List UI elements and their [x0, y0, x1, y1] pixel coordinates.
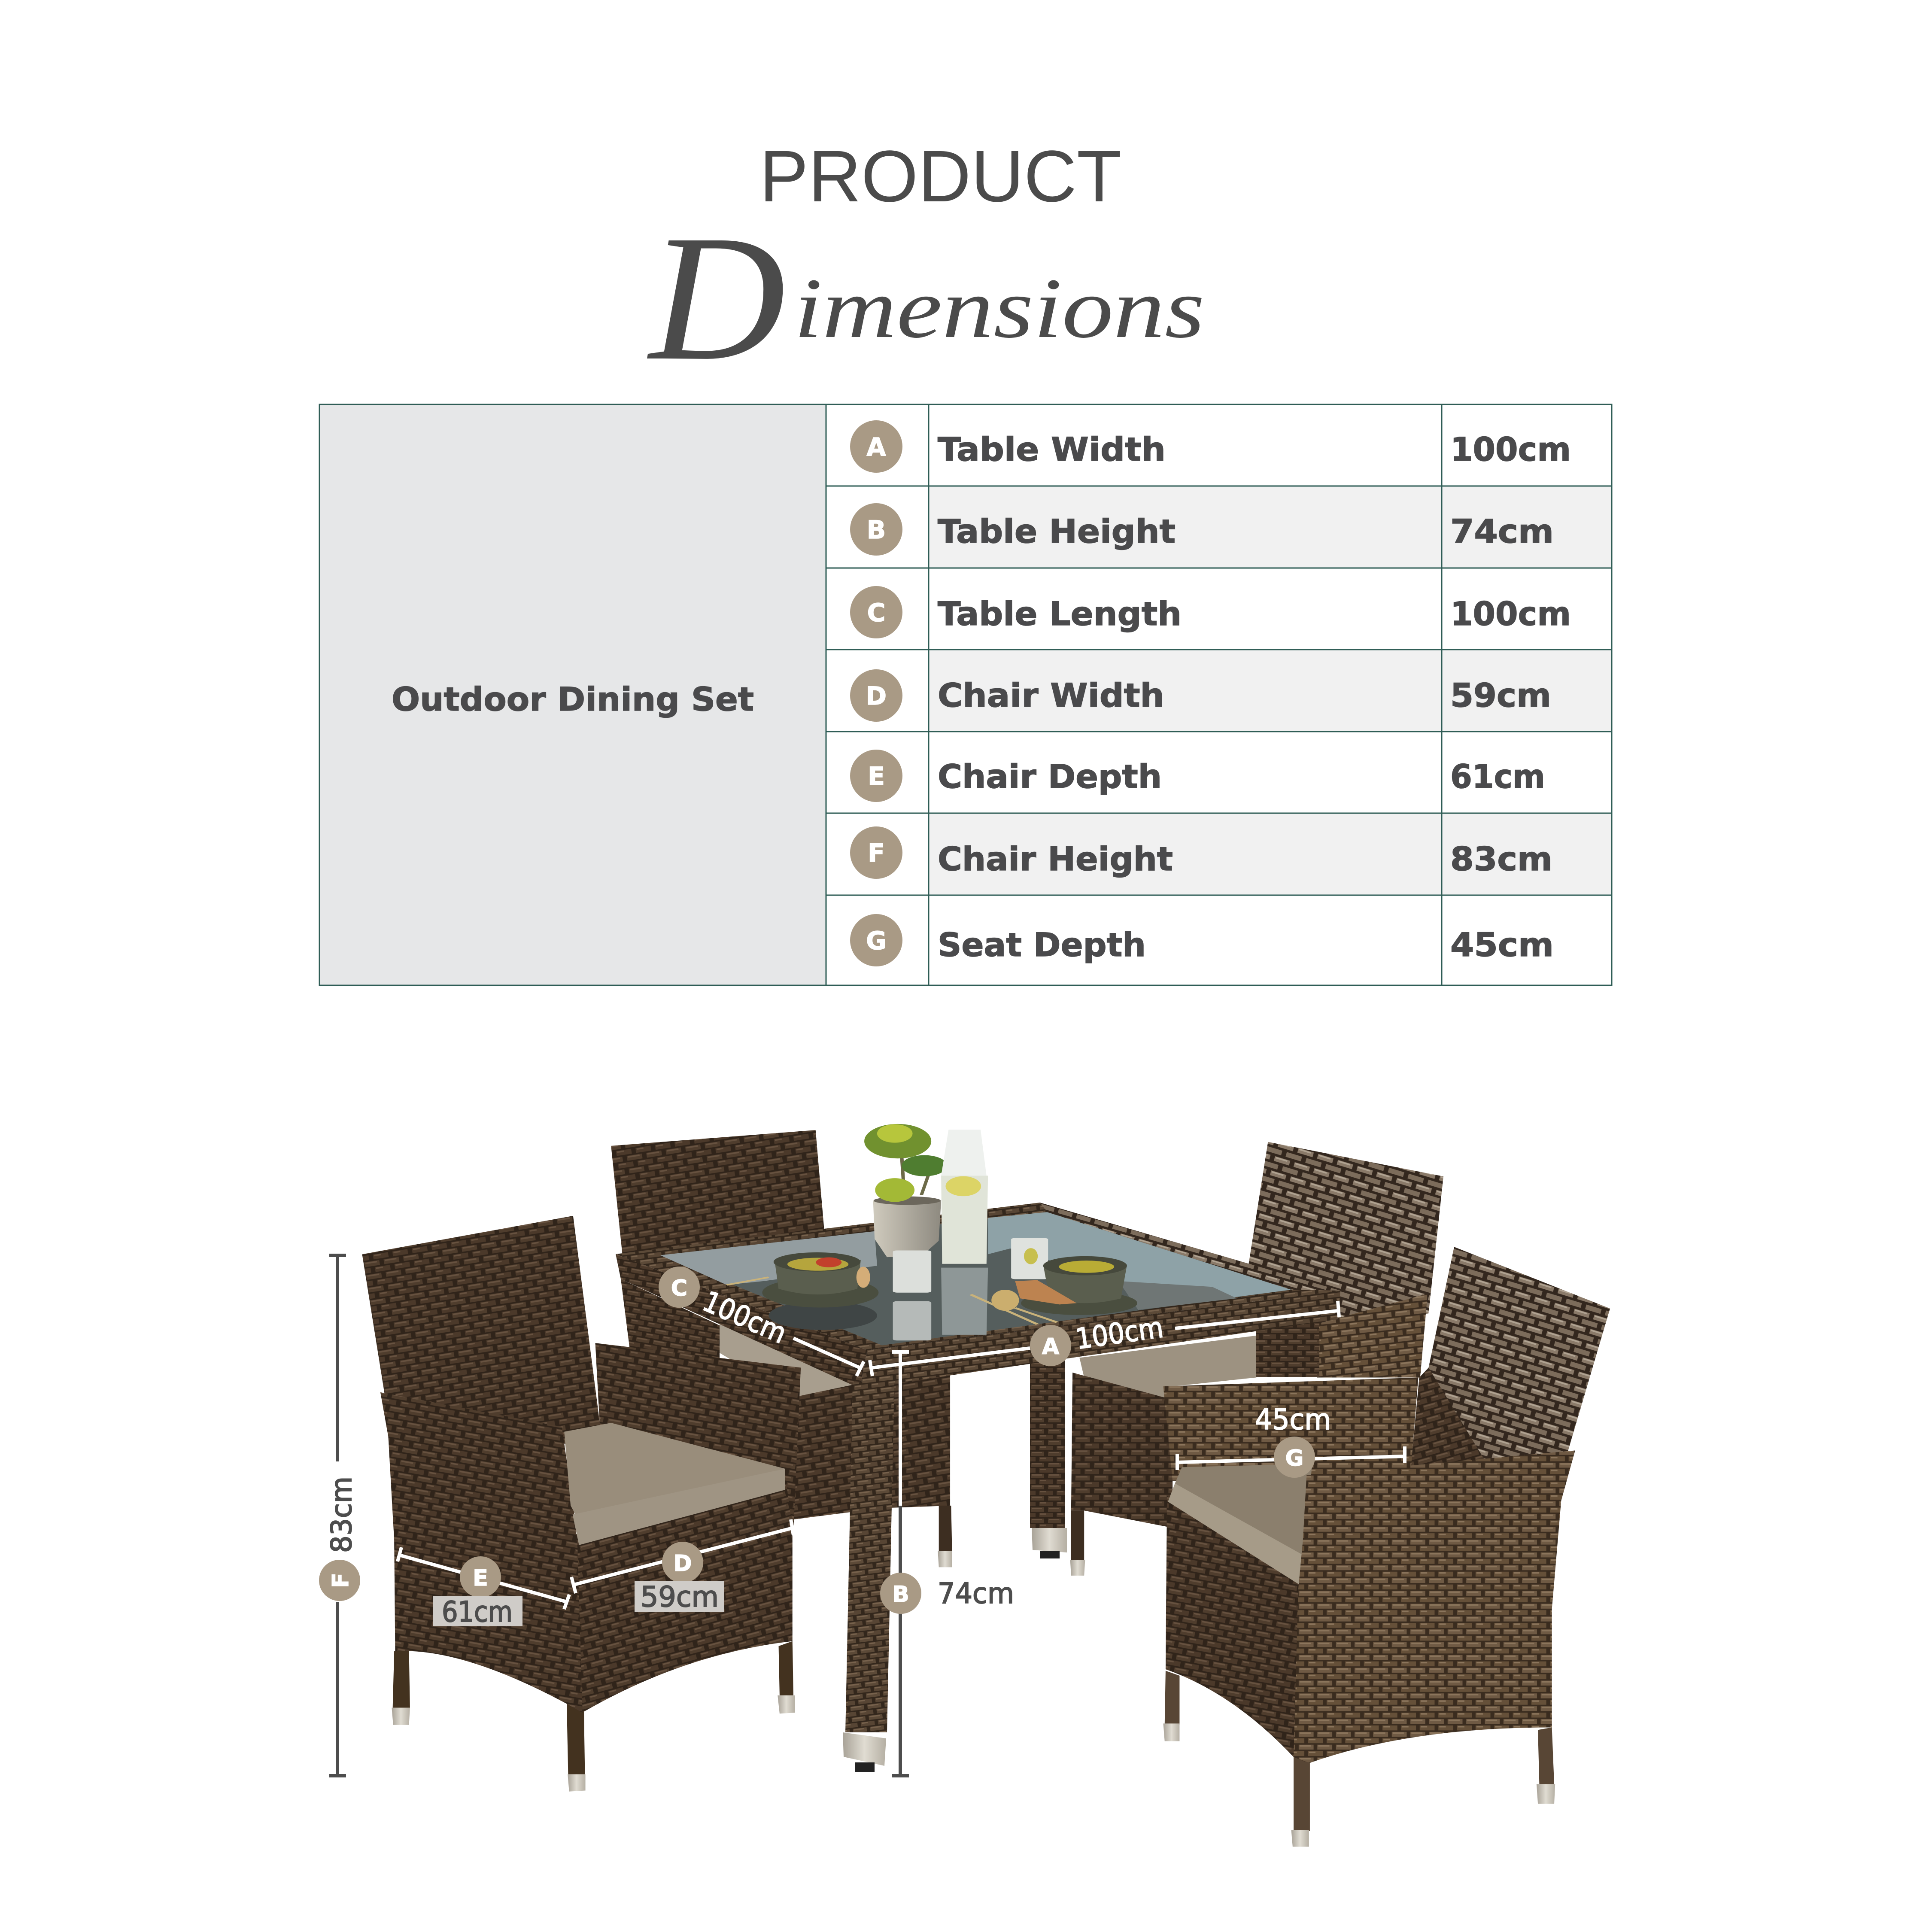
table right rear leg [1030, 1349, 1067, 1558]
row C: table length: C [867, 598, 885, 627]
dimension D: chair width: D [673, 1551, 692, 1577]
inner shadow [1410, 1367, 1492, 1476]
panel: product name cell: Outdoor Dining Set [392, 680, 754, 718]
seat cushion [564, 1423, 785, 1545]
dimension E: chair depth: E [473, 1565, 488, 1591]
right plate and bowl [1015, 1256, 1137, 1315]
illustration: table glass and setting [660, 1124, 1291, 1345]
dimension C: table length: C [671, 1276, 687, 1301]
row B: table height: Table Height [938, 512, 1176, 550]
dimension C: table length: 100cm [698, 1285, 791, 1350]
row G: seat depth: Seat Depth [938, 926, 1146, 964]
dimension F: chair height [319, 1255, 360, 1776]
dimension D: chair width: 59cm [641, 1580, 719, 1613]
plant [864, 1124, 947, 1257]
row F: chair height: F [868, 838, 885, 868]
inner arm [595, 1343, 801, 1530]
row F: chair height: 83cm [1450, 840, 1552, 878]
table glass [660, 1212, 1291, 1345]
row B: table height: 74cm [1450, 512, 1554, 550]
dimension A: table width: 100cm [1074, 1311, 1165, 1356]
dimension D: chair width [571, 1519, 793, 1613]
dimension G: seat depth: G [1285, 1446, 1303, 1471]
dimension A: table width [870, 1301, 1339, 1376]
left plate and bowl [762, 1252, 878, 1330]
row G: seat depth: G [866, 926, 887, 955]
row E: chair depth [850, 750, 1545, 802]
row E: chair depth: 61cm [1450, 757, 1545, 796]
front panel [571, 1481, 793, 1712]
row C: table length: Table Length [938, 595, 1182, 633]
row A: table width: A [867, 432, 886, 462]
row C: table length [850, 586, 1571, 638]
table top rim [616, 1203, 1340, 1388]
inner arm [1163, 1377, 1419, 1481]
side panel [380, 1392, 583, 1713]
row D: chair width: D [866, 681, 887, 711]
row A: table width [850, 420, 1571, 473]
under seat panel [1166, 1496, 1305, 1762]
dimension G: seat depth: 45cm [1255, 1403, 1331, 1436]
dimension B: table height [880, 1352, 1014, 1776]
dimension G: seat depth [1177, 1403, 1405, 1478]
dimension E: chair depth: 61cm [442, 1595, 513, 1628]
row F: chair height: Chair Height [938, 840, 1173, 878]
title: PRODUCT: PRODUCT [759, 136, 1121, 217]
chair legs [392, 1641, 795, 1792]
backrest [362, 1216, 602, 1444]
row B: table height [850, 503, 1554, 556]
row C: table length: 100cm [1450, 595, 1571, 633]
dimension A: table width: A [1042, 1334, 1059, 1360]
illustration: front right chair [1163, 1247, 1610, 1847]
dimensions table [319, 404, 1612, 985]
row E: chair depth: E [868, 762, 885, 791]
dimension B: table height: B [892, 1582, 909, 1607]
dimension B: table height: 74cm [938, 1577, 1014, 1610]
row G: seat depth [850, 914, 1554, 966]
illustration: glass table [616, 1203, 1340, 1772]
row D: chair width [850, 669, 1551, 722]
seat cushion [1168, 1464, 1312, 1585]
illustration: front left chair [362, 1216, 801, 1792]
title: Dimensions script [646, 198, 1205, 398]
row D: chair width: Chair Width [938, 676, 1164, 714]
panel: product name cell [319, 404, 826, 985]
dimension C: table length [659, 1267, 864, 1376]
cutlery [727, 1277, 1057, 1324]
side panel [1294, 1450, 1575, 1763]
row A: table width: 100cm [1450, 430, 1571, 468]
dimension F: chair height: 83cm [325, 1476, 358, 1553]
illustration: rear right chair [1070, 1142, 1443, 1576]
title: Dimensions script: D [646, 198, 786, 398]
row A: table width: Table Width [938, 430, 1166, 468]
row E: chair depth: Chair Depth [938, 757, 1162, 796]
title: Dimensions script: imensions [794, 261, 1205, 356]
chair legs [1163, 1671, 1555, 1847]
carafe [941, 1130, 988, 1335]
dimension F: chair height: F [328, 1573, 354, 1588]
illustration: rear left chair [611, 1130, 952, 1567]
table front leg [843, 1382, 894, 1772]
row F: chair height [850, 826, 1552, 879]
row D: chair width: 59cm [1450, 676, 1551, 714]
dimension E: chair depth [398, 1547, 569, 1628]
row G: seat depth: 45cm [1450, 926, 1554, 964]
glass tumblers [893, 1238, 1048, 1340]
row B: table height: B [867, 515, 886, 544]
backrest [1428, 1247, 1610, 1476]
